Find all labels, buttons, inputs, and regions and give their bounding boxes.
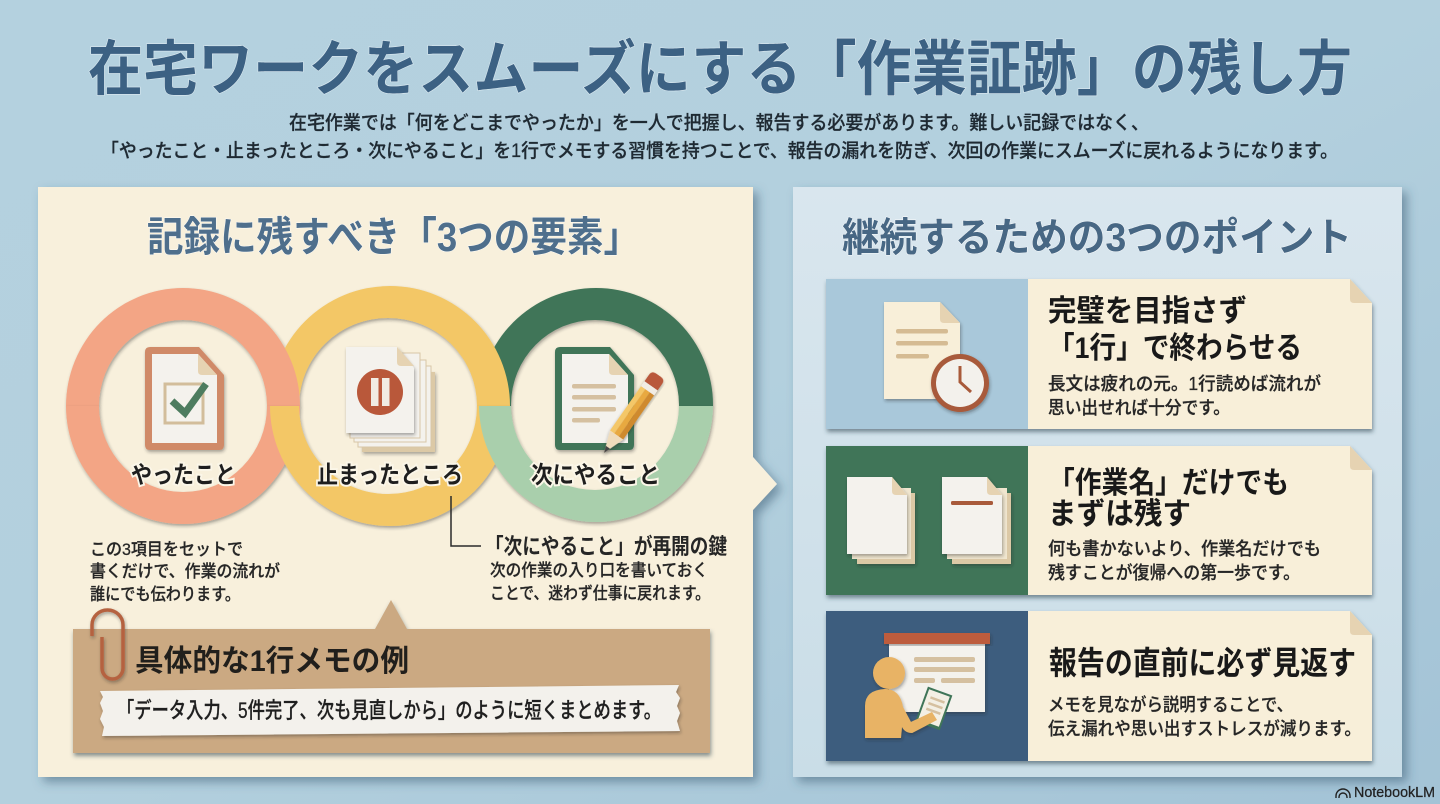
card 3: 伝え漏れや思い出すストレスが減ります。 bbox=[1048, 718, 1361, 739]
intro text: 「やったこと・止まったところ・次にやること」を1行でメモする習慣を持つことで、報告の漏れを防ぎ、次回の作業にスムーズに戻れるようになります。 bbox=[101, 139, 1338, 162]
card 1 heading: 完璧を目指さず bbox=[1048, 295, 1247, 328]
icon: document and pencil bbox=[555, 347, 665, 458]
note: three items bbox=[90, 540, 280, 604]
note: key to resume: ことで、迷わず仕事に戻れます。 bbox=[490, 584, 710, 603]
venn rings bbox=[66, 286, 713, 526]
icon: two document stacks bbox=[847, 477, 1011, 564]
card 2 heading: 「作業名」だけでも bbox=[1048, 467, 1289, 500]
icon: paper clip bbox=[92, 610, 123, 679]
example memo box bbox=[73, 600, 710, 753]
card 2 body: 何も書かないより、作業名だけでも bbox=[1048, 539, 1321, 559]
note: key to resume: 次の作業の入り口を書いておく bbox=[490, 561, 708, 580]
icon: presenter with board bbox=[865, 633, 990, 738]
intro text: 在宅作業では「何をどこまでやったか」を一人で把握し、報告する必要があります。難しい記録ではなく、 bbox=[289, 112, 1149, 134]
title: 在宅ワークをスムーズにする「作業証跡」の残し方 bbox=[88, 36, 1352, 103]
intro text bbox=[101, 112, 1338, 162]
memo example text: 「データ入力、5件完了、次も見直しから」のように短くまとめます。 bbox=[117, 698, 661, 723]
card 1 body: 長文は疲れの元。1行読めば流れが bbox=[1048, 373, 1321, 394]
watermark: NotebookLM: NotebookLM bbox=[1354, 785, 1435, 801]
panel heading: 記録に残すべき「3つの要素」 bbox=[147, 214, 640, 260]
note: three items: 書くだけで、作業の流れが bbox=[90, 561, 280, 581]
note: key to resume: 「次にやること」が再開の鍵 bbox=[485, 534, 727, 559]
label: stopped: 止まったところ bbox=[317, 462, 463, 489]
card 3 heading: 報告の直前に必ず見返す bbox=[1049, 645, 1356, 681]
panel heading: 継続するための3つのポイント bbox=[842, 216, 1352, 260]
panel: 3 elements bbox=[38, 187, 777, 777]
icon: stacked documents with pause bbox=[346, 347, 435, 452]
card 1: 「1行」で終わらせる bbox=[1048, 332, 1302, 365]
label: next: 次にやること bbox=[531, 462, 660, 489]
card 2 bbox=[826, 446, 1372, 595]
memo heading: 具体的な1行メモの例 bbox=[135, 645, 409, 678]
panel background bbox=[793, 187, 1402, 777]
card 2: まずは残す bbox=[1048, 498, 1191, 531]
note: three items: この3項目をセットで bbox=[90, 540, 243, 559]
note: three items: 誰にでも伝わります。 bbox=[90, 585, 240, 604]
panel: 3 points bbox=[793, 187, 1402, 777]
card 2: 残すことが復帰への第一歩です。 bbox=[1048, 562, 1300, 583]
note: key to resume bbox=[485, 534, 727, 603]
card 1 bbox=[826, 279, 1372, 429]
icon: document with check bbox=[145, 347, 224, 450]
torn paper strip bbox=[100, 685, 680, 736]
connector line bbox=[451, 496, 481, 546]
card 3 bbox=[826, 611, 1372, 761]
card 3 body: メモを見ながら説明することで、 bbox=[1048, 694, 1293, 715]
card 1: 思い出せれば十分です。 bbox=[1048, 398, 1230, 418]
panel background with arrow bbox=[38, 187, 777, 777]
icon: note and clock bbox=[884, 302, 989, 412]
label: done: やったこと bbox=[131, 462, 236, 489]
